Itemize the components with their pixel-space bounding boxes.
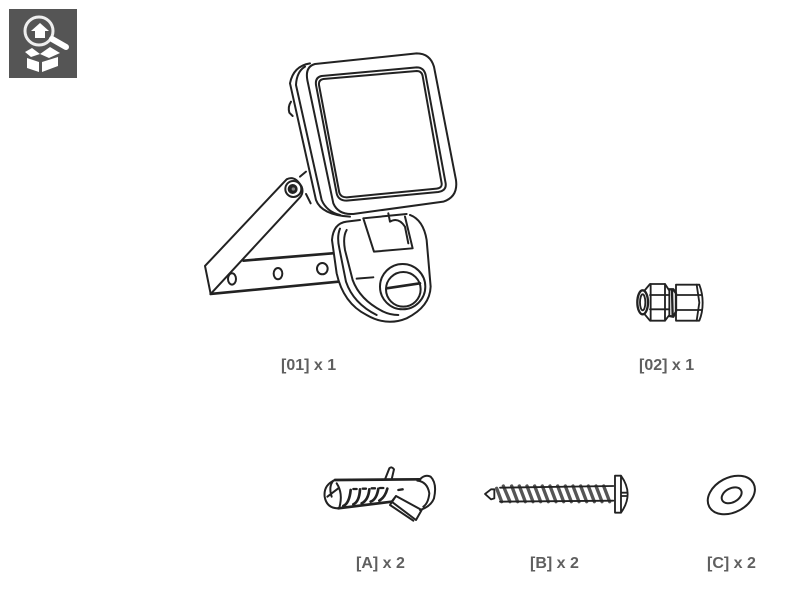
bracket arm: [205, 178, 303, 294]
label: [C] x 2: [C] x 2: [707, 555, 756, 572]
illustration: screw [B]: [485, 476, 628, 513]
illustration: washer [C]: [701, 468, 762, 522]
mounting holes: [228, 263, 328, 285]
illustration: cable gland [02]: [637, 284, 703, 321]
label: [01] x 1: [01] x 1: [281, 357, 336, 374]
bracket base bar: [211, 253, 338, 294]
floodlight window: [316, 67, 446, 201]
PIR sensor lens: [380, 264, 425, 309]
illustration: floodlight [01]: [205, 53, 456, 322]
icon: magnifier inspecting open box: [9, 9, 77, 78]
label: [A] x 2: [A] x 2: [356, 555, 405, 572]
sensor body: [332, 215, 431, 322]
label: [B] x 2: [B] x 2: [530, 555, 579, 572]
floodlight front frame: [307, 53, 456, 214]
pivot screw: [285, 181, 301, 197]
floodlight back housing: [290, 63, 350, 217]
label: [02] x 1: [02] x 1: [639, 357, 694, 374]
rear tab: [289, 102, 293, 116]
illustration: wall plug [A]: [325, 467, 435, 521]
hinge cutout: [363, 213, 413, 252]
